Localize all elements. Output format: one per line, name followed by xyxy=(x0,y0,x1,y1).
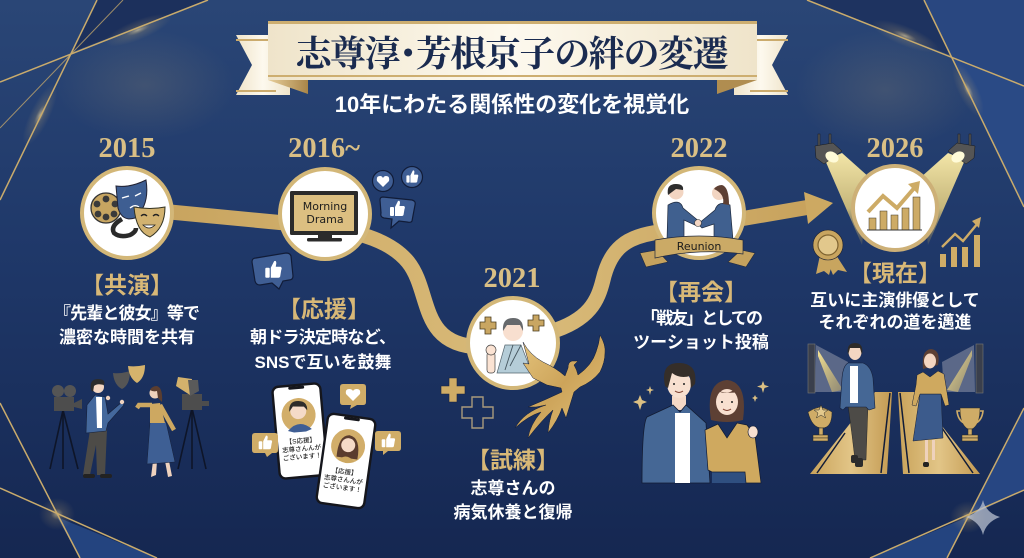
description: 互いに主演俳優として xyxy=(810,291,980,310)
man xyxy=(642,363,710,483)
description line 2: SNSで互いを鼓舞 xyxy=(255,352,391,372)
circle: morning drama tv: Drama xyxy=(306,213,344,226)
step 2016 xyxy=(250,133,422,372)
circle: morning drama tv: Morning xyxy=(303,200,347,213)
heart bubble xyxy=(340,384,366,409)
sparkles xyxy=(633,381,769,410)
description line 2: 病気休養と復帰 xyxy=(454,502,572,522)
illustration: film set xyxy=(50,365,209,478)
phone right xyxy=(316,413,376,509)
description line 2: 濃密な時間を共有 xyxy=(59,328,195,347)
title ribbon xyxy=(236,21,788,95)
description line 2: ツーショット投稿 xyxy=(633,332,769,352)
title: 志尊淳・芳根京子の絆の変遷 xyxy=(296,34,728,74)
year 2015: 2015 xyxy=(98,133,156,164)
year 2022: 2022 xyxy=(670,133,728,164)
description: 朝ドラ決定時など、 xyxy=(250,328,396,347)
left camera xyxy=(50,385,82,469)
banner: reunion: Reunion xyxy=(677,240,721,253)
circle: growth chart xyxy=(853,166,937,250)
banner: reunion xyxy=(640,236,755,267)
description: 志尊さんの xyxy=(470,478,556,498)
heading: 【共演】 xyxy=(81,272,173,298)
stage lights xyxy=(808,344,983,393)
description: 「戦友」としての xyxy=(641,308,763,328)
social badges xyxy=(372,166,422,228)
circle: patient xyxy=(468,298,558,388)
heading: 【現在】 xyxy=(849,260,941,286)
step 2021 xyxy=(441,263,605,522)
phone right: 【応援】 xyxy=(331,465,358,478)
like bubble xyxy=(252,253,293,289)
step 2022 xyxy=(633,133,769,352)
year 2026: 2026 xyxy=(866,133,924,164)
description line 2: それぞれの道を邁進 xyxy=(818,313,972,332)
step 2026 xyxy=(810,133,981,332)
circle: handshake xyxy=(654,168,744,258)
illustration: red carpets xyxy=(808,343,983,474)
icon: medal xyxy=(813,230,847,275)
heading: 【再会】 xyxy=(655,279,747,305)
icon: gold plus xyxy=(441,378,465,402)
carpets xyxy=(810,392,980,474)
timeline path with arrow xyxy=(170,192,833,347)
masks xyxy=(113,365,145,389)
woman walking xyxy=(912,349,949,467)
phone left xyxy=(272,383,328,479)
woman xyxy=(705,380,761,483)
illustration: couple xyxy=(633,363,769,483)
circle: film and masks xyxy=(82,168,172,258)
phone right: ございます！ xyxy=(322,480,362,494)
icon: small growth chart xyxy=(940,217,981,267)
phone left: 【S応援】 xyxy=(285,435,316,446)
right camera xyxy=(176,377,209,469)
phone right: 志尊さんんが xyxy=(323,472,364,487)
circle: morning drama tv xyxy=(280,169,370,259)
woman xyxy=(137,386,175,477)
description: 『先輩と彼女』等で xyxy=(54,303,200,323)
phone left: ございます！ xyxy=(282,450,322,463)
icon: outline plus xyxy=(462,397,493,428)
left like bubble xyxy=(252,433,278,457)
step 2015 xyxy=(54,133,200,347)
man walking xyxy=(840,343,875,467)
heading: 【応援】 xyxy=(278,296,370,322)
year 2016: 2016~ xyxy=(288,133,360,164)
year 2021: 2021 xyxy=(484,263,540,294)
man xyxy=(83,379,124,478)
right trophy xyxy=(957,408,983,441)
illustration: phones xyxy=(252,383,401,509)
right like bubble xyxy=(375,431,401,455)
icon: watermark sparkle xyxy=(966,500,1000,535)
phone left: 志尊さんんが xyxy=(282,442,322,455)
heading: 【試練】 xyxy=(467,447,559,473)
left trophy xyxy=(808,405,832,441)
spotlights xyxy=(815,134,975,245)
subtitle: 10年にわたる関係性の変化を視覚化 xyxy=(335,92,689,117)
icon: phoenix xyxy=(515,335,605,438)
